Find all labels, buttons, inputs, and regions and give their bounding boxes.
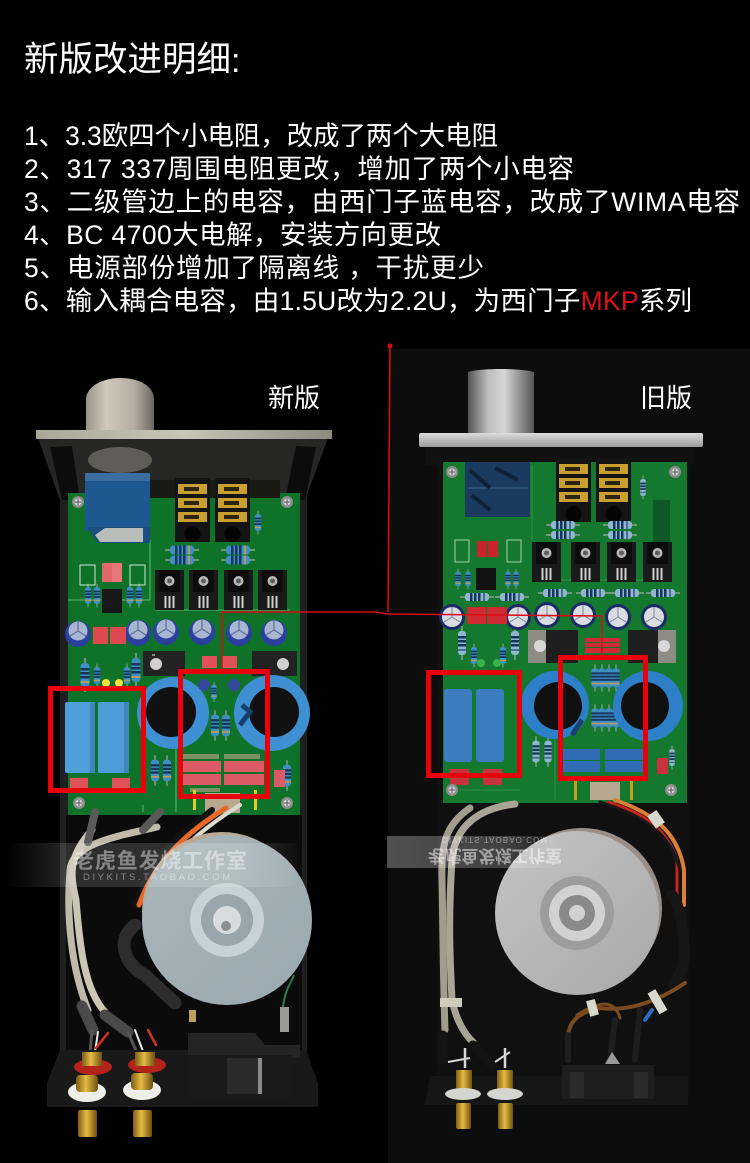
small red capacitors [202,656,237,668]
highlight box: old input capacitors [428,672,520,776]
knob [468,369,534,433]
connectors [193,790,257,813]
op amp and input film capacitors [80,563,145,613]
op amp and film capacitors [455,540,521,590]
watermark: old version, mirrored: DIYKITS.TAOBAO.COM [442,835,547,844]
red film capacitors lower [183,761,285,787]
transformer [142,832,312,1005]
front plate [36,430,332,500]
RCA terminals [445,1048,523,1129]
text block: improvement list: 6、输入耦合电容，由1.5U改为2.2U，为西门子MKP系列 [24,286,692,316]
red film capacitors upper [93,627,126,644]
IEC socket [188,975,300,1100]
enclosure [425,445,693,465]
panel: old version backdrop [388,349,750,1163]
RCA terminals [68,1052,166,1137]
mounting screws [446,466,681,796]
red film capacitors upper [467,607,507,624]
enclosure [60,495,307,1055]
circuit board [439,458,687,803]
label strip [653,500,670,542]
heat sinks [155,570,287,610]
transformer [495,828,662,995]
photo: new version amplifier [36,378,332,1137]
highlight box: new center section [180,672,268,796]
watermark: old version, mirrored [387,835,562,868]
circuit board [65,473,310,815]
label: new version: 新版 [268,383,320,413]
small red capacitors [585,638,620,653]
text block: improvement list: 4、BC 4700大电解，安装方向更改 [24,220,441,250]
audio cables [440,804,515,1065]
knob [86,378,154,430]
input film blue capacitors [65,702,129,773]
text block: improvement list: 1、3.3欧四个小电阻，改成了两个大电阻 [24,121,498,151]
title: : [231,42,240,80]
potentiometer [85,473,150,543]
power wires [568,800,685,1060]
front plate [419,433,703,447]
large reservoir capacitors [137,675,310,751]
audio cables [69,812,160,1075]
text block: improvement list [24,121,740,316]
mounting screws [72,496,293,809]
voltage regulators [143,651,297,676]
central resistor cluster [183,754,260,792]
resistors [455,476,680,769]
watermark: old version, mirrored: 老虎鱼发烧工作室 [428,846,562,866]
rear panel [425,1076,688,1105]
watermark: new version [7,843,297,887]
connectors [574,780,633,800]
small caps near center [198,679,240,691]
rear panel [47,1050,318,1107]
resistors [80,511,291,791]
output jacks [175,478,250,542]
potentiometer [465,462,530,517]
input film blue capacitors [444,689,504,762]
blue film capacitors lower [563,749,643,772]
heat sinks [532,542,672,582]
title: 新版改进明细 [24,41,231,79]
highlight box: old center section [560,658,646,778]
photo: old version amplifier [419,369,703,1129]
callout: red connector lines [222,344,602,670]
electrolytic capacitors [439,602,667,630]
text block: improvement list: 5、电源部份增加了隔离线 ，干扰更少 [24,253,484,283]
label: old version: 旧版 [640,383,692,413]
electrolytic capacitors [65,619,287,647]
watermark: new version: DIYKITS.TAOBAO.COM [83,872,230,883]
LEDs [477,659,501,667]
small red capacitors bottom [70,778,130,791]
highlight box: new input capacitors [50,688,144,790]
watermark: new version: 老虎鱼发烧工作室 [73,849,247,873]
IEC socket [562,1052,654,1099]
text block: improvement list: 3、二级管边上的电容，由西门子蓝电容，改成了WIMA电容 [24,187,740,217]
text block: improvement list: 2、317 337周围电阻更改，增加了两个小电容 [24,154,574,184]
wires to transformer [135,805,240,905]
small red capacitors bottom [450,758,668,785]
output jacks [556,458,631,522]
LEDs [102,679,123,687]
voltage regulators [528,630,676,663]
large reservoir capacitors [521,671,683,741]
black sleeve [124,925,175,1003]
